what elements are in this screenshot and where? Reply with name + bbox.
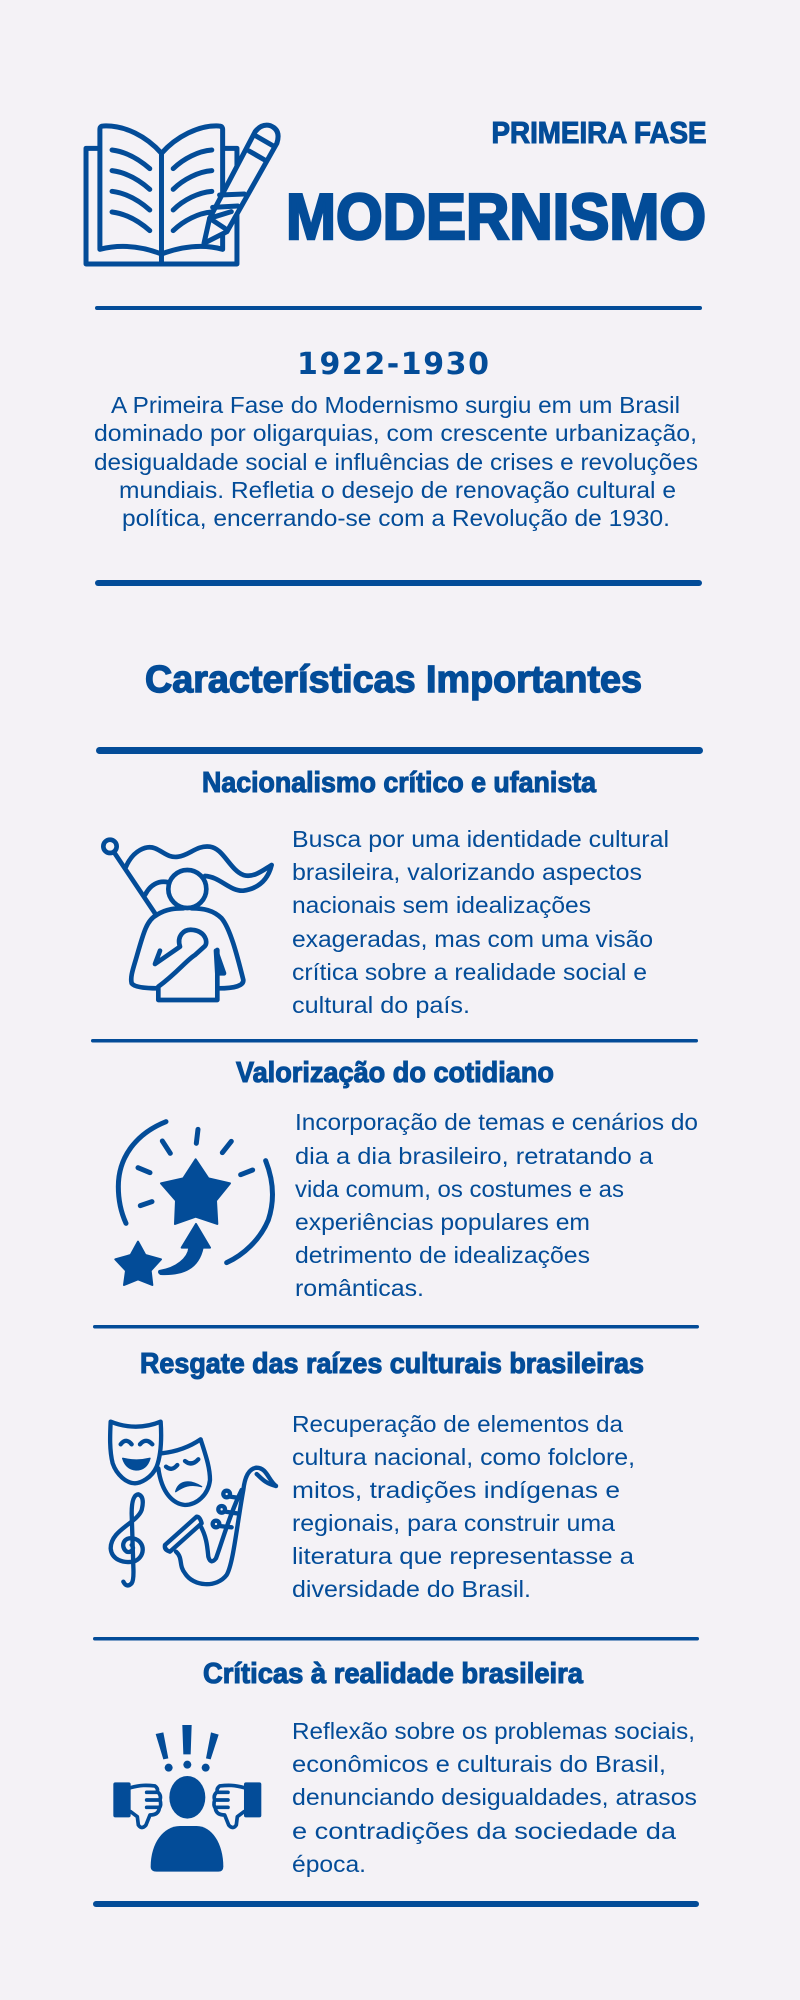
heading: resgate: Resgate das raízes culturais brasileiras xyxy=(140,1348,644,1380)
text: nacionalismo: nacionais sem idealizações xyxy=(292,892,591,918)
panel: resgate das raízes culturais xyxy=(110,1348,644,1602)
intro text block: dominado por oligarquias, com crescente urbanização, xyxy=(94,420,697,446)
text: valorização: vida comum, os costumes e as xyxy=(295,1176,624,1202)
panel: nacionalismo crítico e ufanista xyxy=(103,767,669,1018)
icon: open book and pencil xyxy=(86,125,278,264)
text: críticas xyxy=(292,1718,697,1877)
icon: theatre masks, clef and saxophone xyxy=(110,1422,276,1585)
icon: stars and arrow xyxy=(115,1122,272,1285)
text: resgate: literatura que representasse a xyxy=(292,1543,635,1569)
text: valorização: detrimento de idealizações xyxy=(295,1242,590,1268)
date heading: 1922-1930: 1922-1930 xyxy=(297,347,489,382)
text: nacionalismo: brasileira, valorizando aspectos xyxy=(292,859,642,885)
text: resgate: cultura nacional, como folclore, xyxy=(292,1444,635,1470)
section heading: características importantes: Características Importantes xyxy=(145,659,642,701)
text: resgate: regionais, para construir uma xyxy=(292,1510,616,1536)
intro text block: A Primeira Fase do Modernismo surgiu em um Brasil xyxy=(111,392,680,418)
text: críticas: e contradições da sociedade da xyxy=(292,1818,677,1844)
intro text block xyxy=(94,392,698,531)
text: resgate: mitos, tradições indígenas e xyxy=(292,1477,620,1503)
text: valorização: Incorporação de temas e cenários do xyxy=(295,1109,698,1135)
intro text block: desigualdade social e influências de crises e revoluções xyxy=(94,449,698,475)
subtitle: primeira fase: PRIMEIRA FASE xyxy=(492,115,706,150)
text: valorização: dia a dia brasileiro, retratando a xyxy=(295,1143,654,1169)
text: nacionalismo: crítica sobre a realidade social e xyxy=(292,959,647,985)
icon: person with thumbs down xyxy=(113,1725,261,1872)
text: nacionalismo: exageradas, mas com uma visão xyxy=(292,926,653,952)
panel: críticas à realidade brasileira xyxy=(113,1658,697,1877)
heading: críticas: Críticas à realidade brasileira xyxy=(203,1658,584,1690)
text: resgate: diversidade do Brasil. xyxy=(292,1576,531,1602)
icon: person with flag xyxy=(103,840,272,1000)
text: nacionalismo xyxy=(292,826,669,1018)
heading: nacionalismo: Nacionalismo crítico e ufanista xyxy=(202,767,597,799)
text: críticas: denunciando desigualdades, atrasos xyxy=(292,1784,697,1810)
heading: valorização: Valorização do cotidiano xyxy=(236,1057,554,1089)
intro text block: política, encerrando-se com a Revolução de 1930. xyxy=(122,505,670,531)
text: resgate xyxy=(292,1411,635,1602)
panel: valorização do cotidiano xyxy=(115,1057,698,1301)
text: críticas: Reflexão sobre os problemas sociais, xyxy=(292,1718,695,1744)
text: nacionalismo: Busca por uma identidade cultural xyxy=(292,826,669,852)
text: valorização: românticas. xyxy=(295,1275,424,1301)
title: modernismo: MODERNISMO xyxy=(286,180,706,253)
text: valorização xyxy=(295,1109,698,1301)
text: resgate: Recuperação de elementos da xyxy=(292,1411,624,1437)
intro text block: mundiais. Refletia o desejo de renovação cultural e xyxy=(119,477,676,503)
text: críticas: econômicos e culturais do Brasil, xyxy=(292,1751,666,1777)
text: nacionalismo: cultural do país. xyxy=(292,992,470,1018)
text: valorização: experiências populares em xyxy=(295,1209,590,1235)
text: críticas: época. xyxy=(292,1851,366,1877)
